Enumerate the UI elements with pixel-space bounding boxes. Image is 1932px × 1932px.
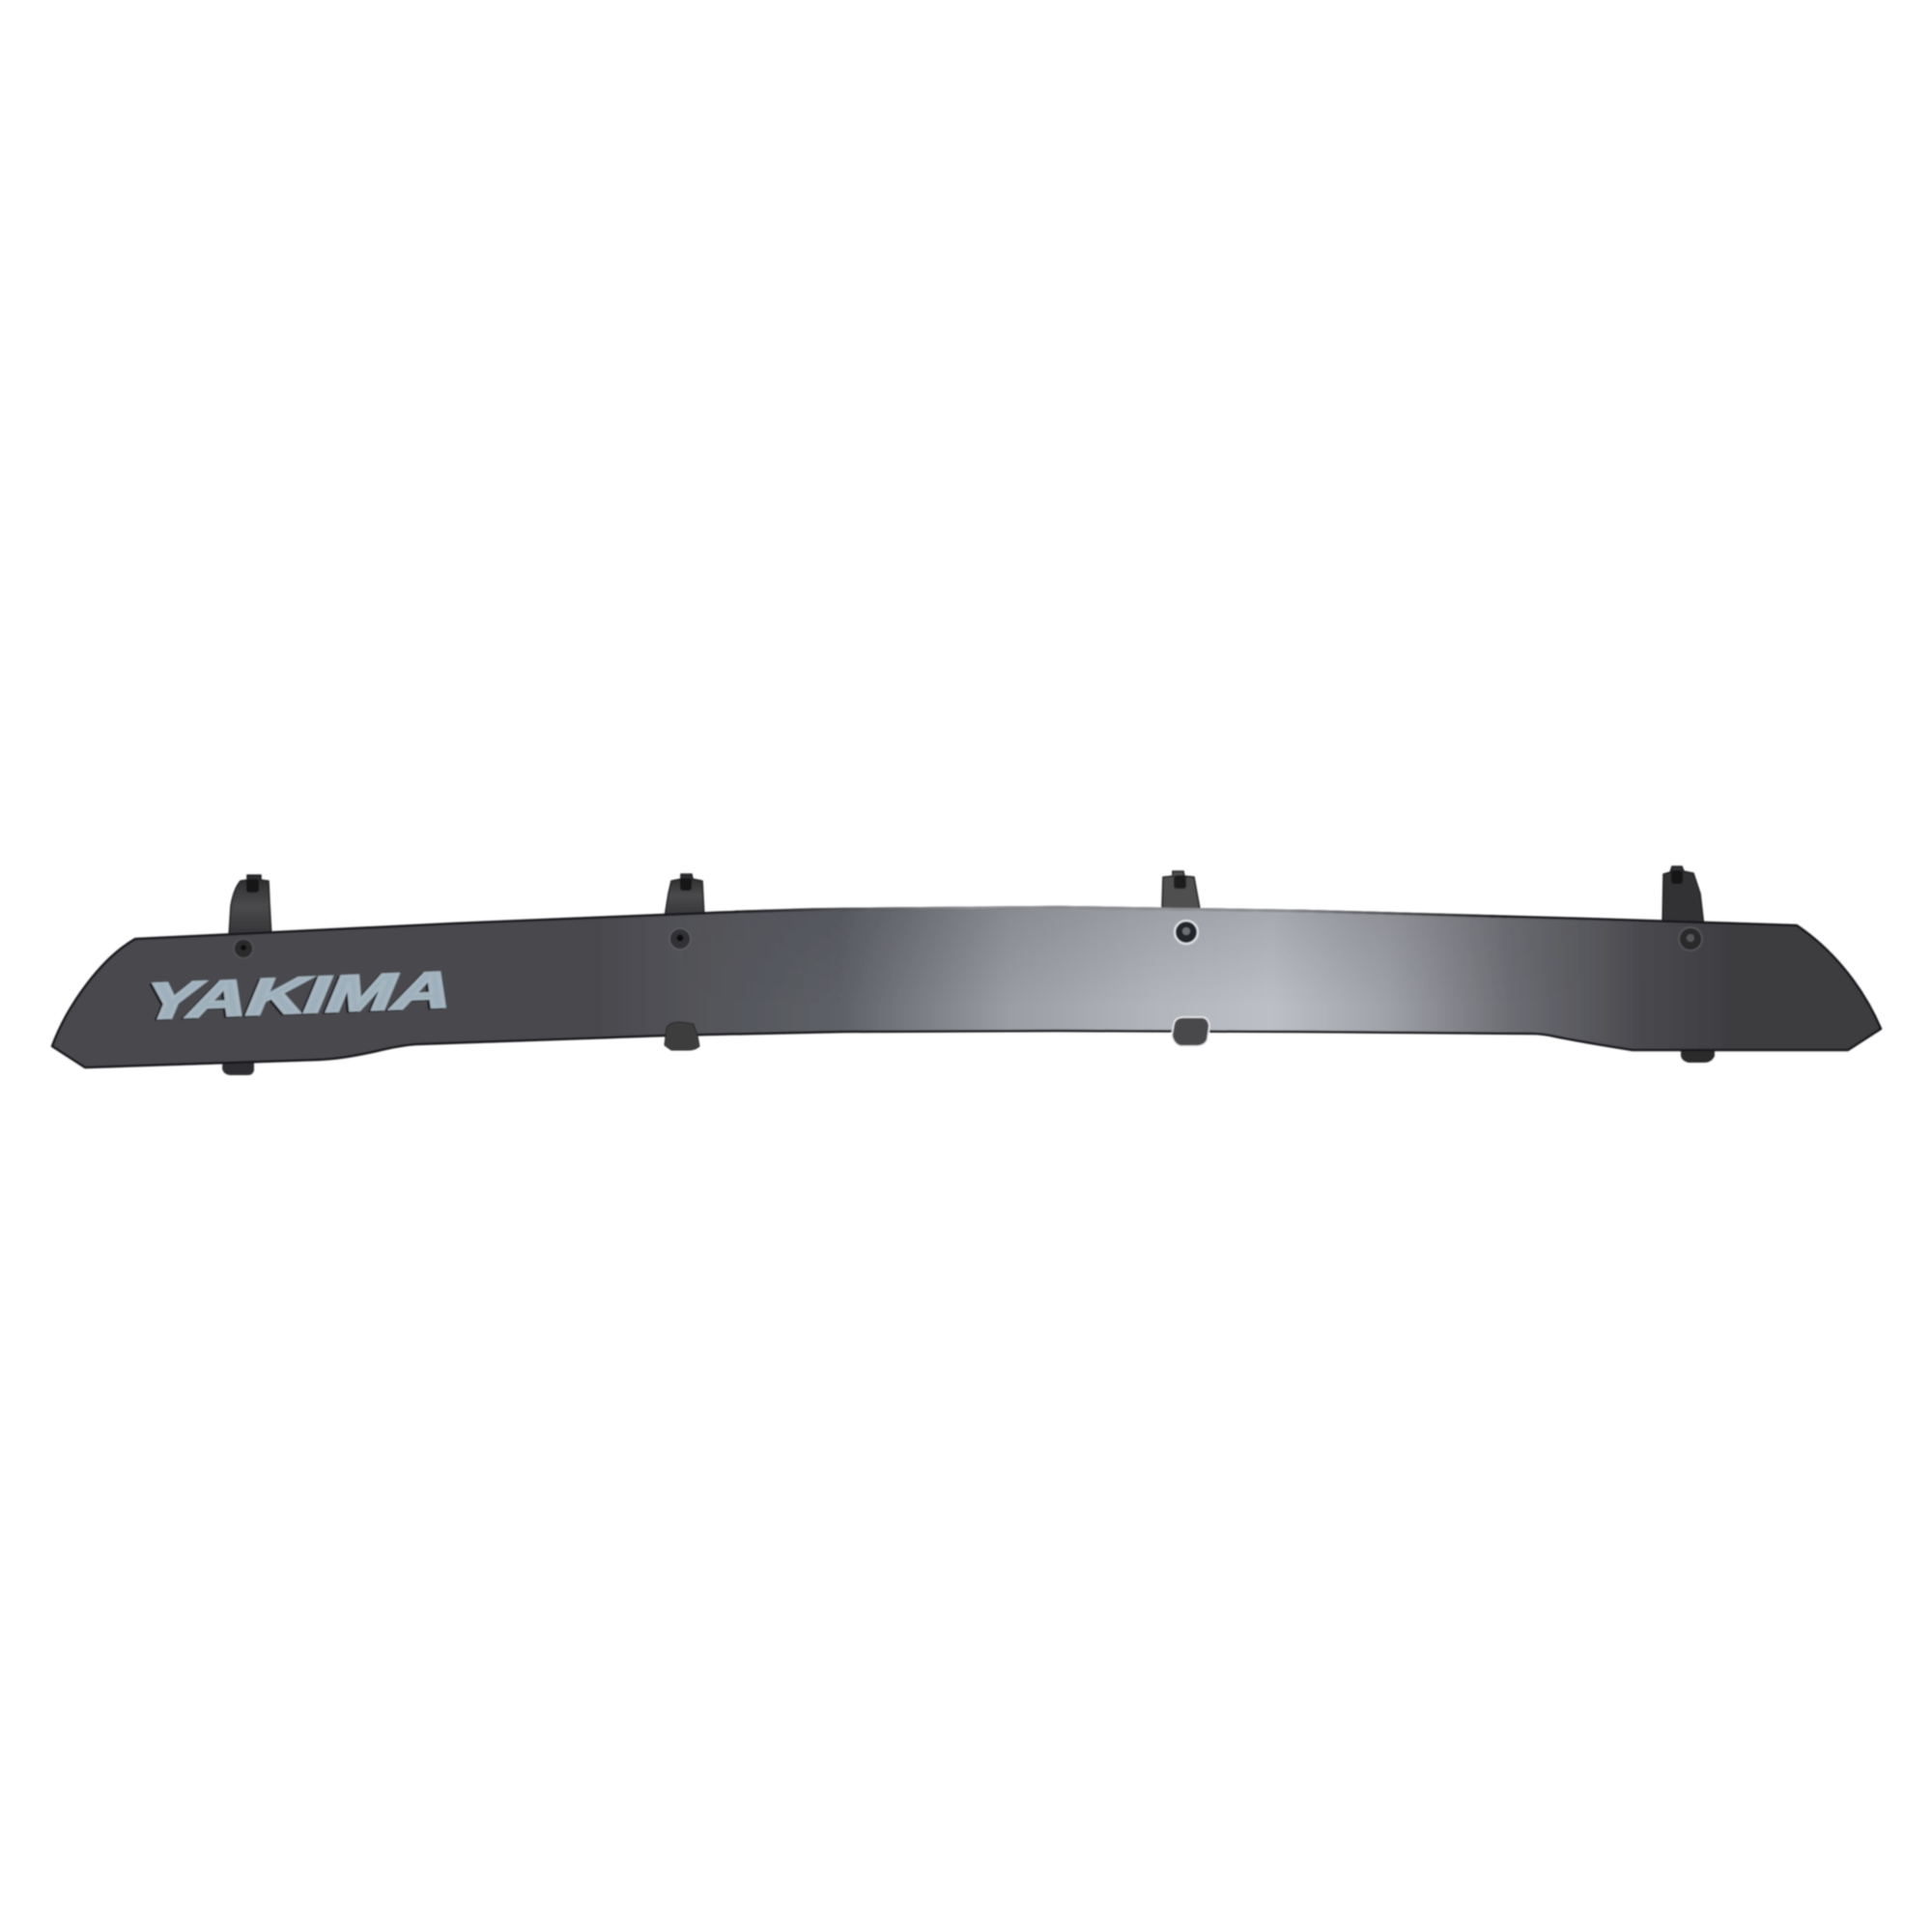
lower tab 3 bbox=[1172, 1017, 1209, 1046]
lower tab 4 bbox=[1681, 1045, 1715, 1063]
bolt 4 bbox=[1679, 927, 1702, 951]
upper clip 1 bbox=[229, 875, 271, 937]
bolt 2 bbox=[669, 928, 691, 950]
panel top shading bbox=[809, 908, 1475, 975]
brand logo: YAKIMA bbox=[133, 960, 466, 1031]
upper clip 2 bbox=[665, 874, 704, 918]
upper clip 4 bbox=[1662, 867, 1704, 927]
lower tab 2 bbox=[665, 1022, 699, 1050]
panel top highlight edge bbox=[734, 907, 1507, 917]
fairing panel bbox=[52, 907, 1881, 1067]
lower tab 1 bbox=[222, 1051, 254, 1075]
bolt 1 bbox=[234, 939, 253, 958]
bolt 3 bbox=[1175, 921, 1198, 944]
upper clip 3 bbox=[1162, 871, 1200, 909]
product illustration: wind fairing bbox=[50, 865, 1884, 1076]
